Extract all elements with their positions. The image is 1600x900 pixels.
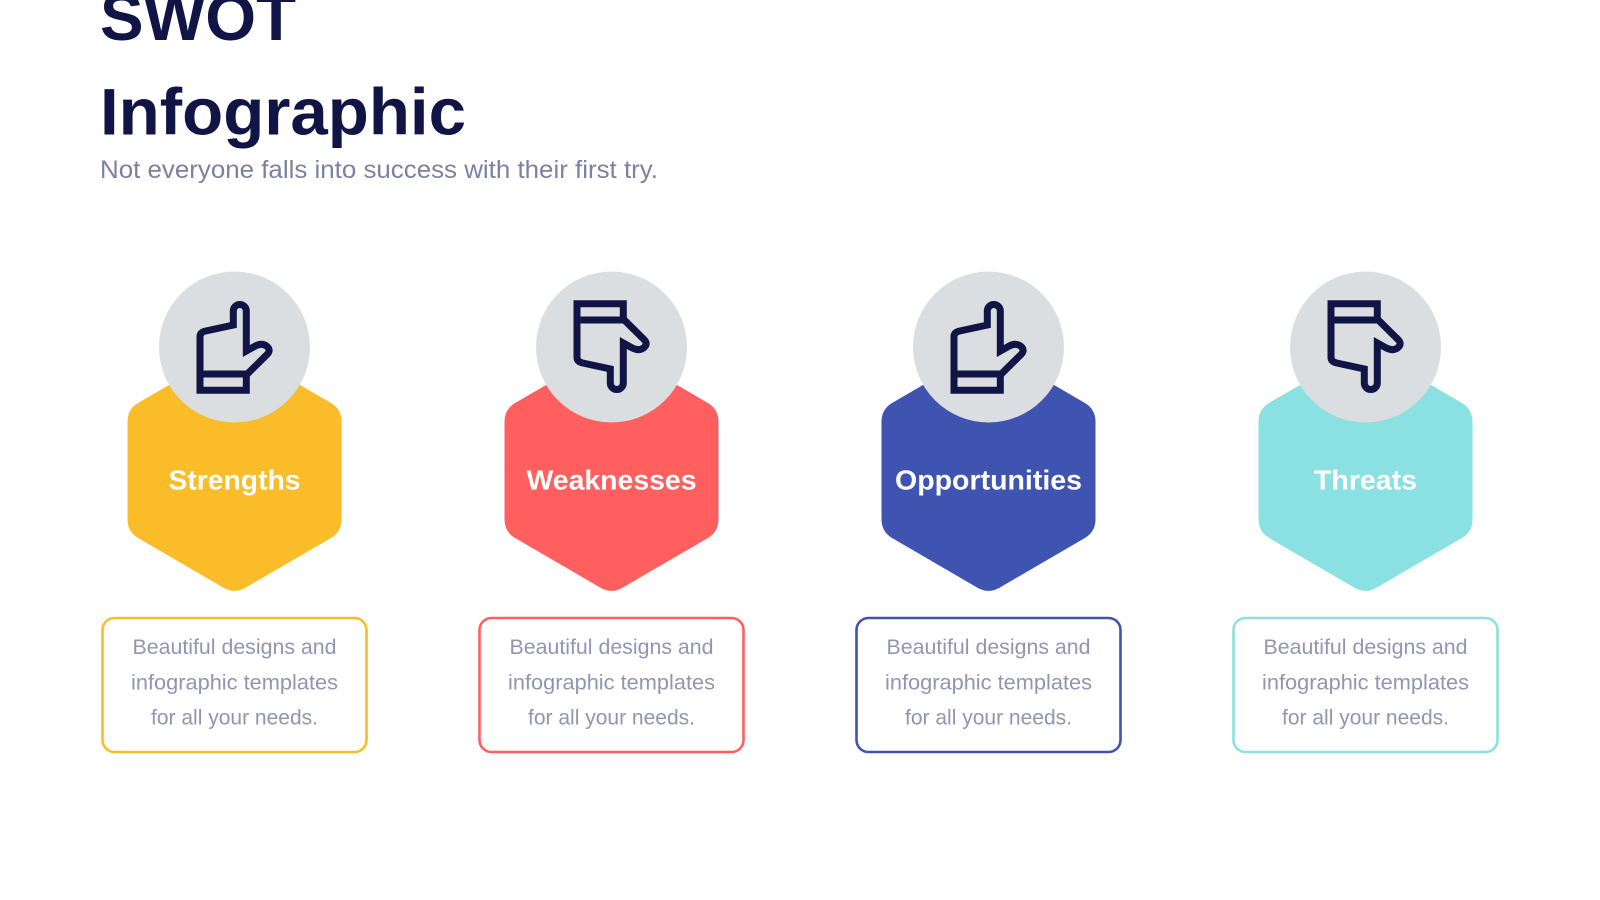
icon: hand pointing up [200, 304, 269, 390]
panel: strengths [102, 272, 366, 752]
description text: strengths: Beautiful designs and [132, 636, 337, 659]
description text: threats [1262, 636, 1469, 730]
description text: strengths [131, 636, 338, 730]
hexagon: weaknesses [504, 350, 718, 591]
subtitle: Not everyone falls into success with their first try. [100, 156, 658, 184]
icon circle [159, 272, 310, 422]
description text: opportunities [885, 636, 1092, 730]
label: opportunities: Opportunities [895, 464, 1082, 496]
description text: opportunities: Beautiful designs and [886, 636, 1091, 659]
description text: threats: for all your needs. [1282, 706, 1449, 730]
icon circle [536, 272, 687, 422]
panel: opportunities [856, 272, 1120, 752]
label: strengths: Strengths [168, 464, 300, 496]
description text: weaknesses [508, 636, 715, 730]
icon circle [1290, 272, 1441, 422]
hexagon: threats [1258, 350, 1472, 591]
icon circle [913, 272, 1064, 422]
panel: threats [1234, 272, 1498, 752]
icon: hand pointing down [577, 304, 646, 390]
icon: hand pointing up [954, 304, 1023, 390]
title: Infographic [100, 74, 466, 148]
label: threats: Threats [1314, 464, 1417, 496]
description text: opportunities: for all your needs. [905, 706, 1072, 730]
description box: opportunities [856, 618, 1120, 752]
label: weaknesses: Weaknesses [526, 464, 696, 496]
description text: weaknesses: infographic templates [508, 672, 715, 694]
description text: strengths: infographic templates [131, 672, 338, 694]
description text: weaknesses: Beautiful designs and [509, 636, 714, 659]
title [100, 0, 466, 148]
description box: strengths [102, 618, 366, 752]
description box: weaknesses [480, 618, 744, 752]
hexagon: strengths [128, 350, 342, 591]
description text: weaknesses: for all your needs. [528, 706, 695, 730]
panel: weaknesses [480, 272, 744, 752]
description text: threats: infographic templates [1262, 672, 1469, 694]
description text: threats: Beautiful designs and [1263, 636, 1468, 659]
description text: strengths: for all your needs. [151, 706, 318, 730]
description box: threats [1234, 618, 1498, 752]
hexagon: opportunities [882, 350, 1096, 591]
description text: opportunities: infographic templates [885, 672, 1092, 694]
icon: hand pointing down [1331, 304, 1400, 390]
